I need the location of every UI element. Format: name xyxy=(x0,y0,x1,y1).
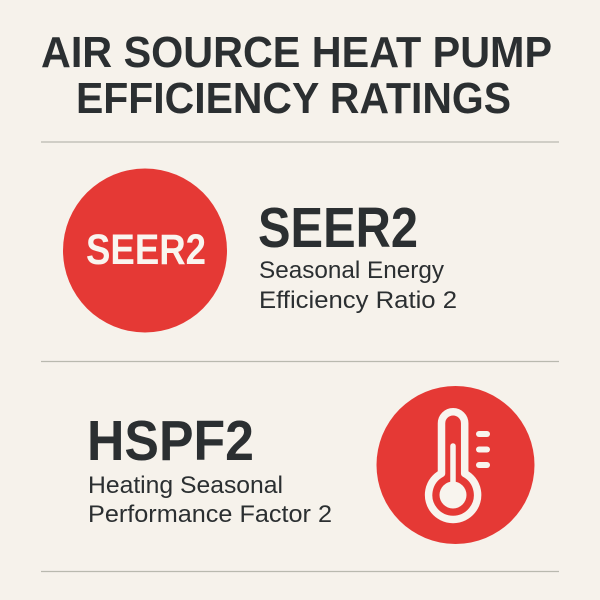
heading: HSPF2: HSPF2 xyxy=(87,409,254,473)
text: SEER2 definition: Efficiency Ratio 2 xyxy=(259,287,457,314)
text: HSPF2 definition: Heating Seasonal xyxy=(88,472,283,499)
text: HSPF2 definition xyxy=(88,472,332,528)
icon: thermometer xyxy=(376,386,534,544)
title xyxy=(41,28,552,123)
text: SEER2 definition: Seasonal Energy xyxy=(259,257,444,284)
icon: SEER2 badge xyxy=(63,168,227,332)
icon: SEER2 badge: SEER2 xyxy=(86,226,206,274)
title: EFFICIENCY RATINGS xyxy=(76,74,511,123)
text: SEER2 definition xyxy=(259,257,457,314)
text: HSPF2 definition: Performance Factor 2 xyxy=(88,501,332,528)
panel: SEER2 xyxy=(63,168,457,332)
heading: SEER2: SEER2 xyxy=(258,196,418,260)
title: AIR SOURCE HEAT PUMP xyxy=(41,28,552,77)
panel: HSPF2 xyxy=(87,386,534,544)
